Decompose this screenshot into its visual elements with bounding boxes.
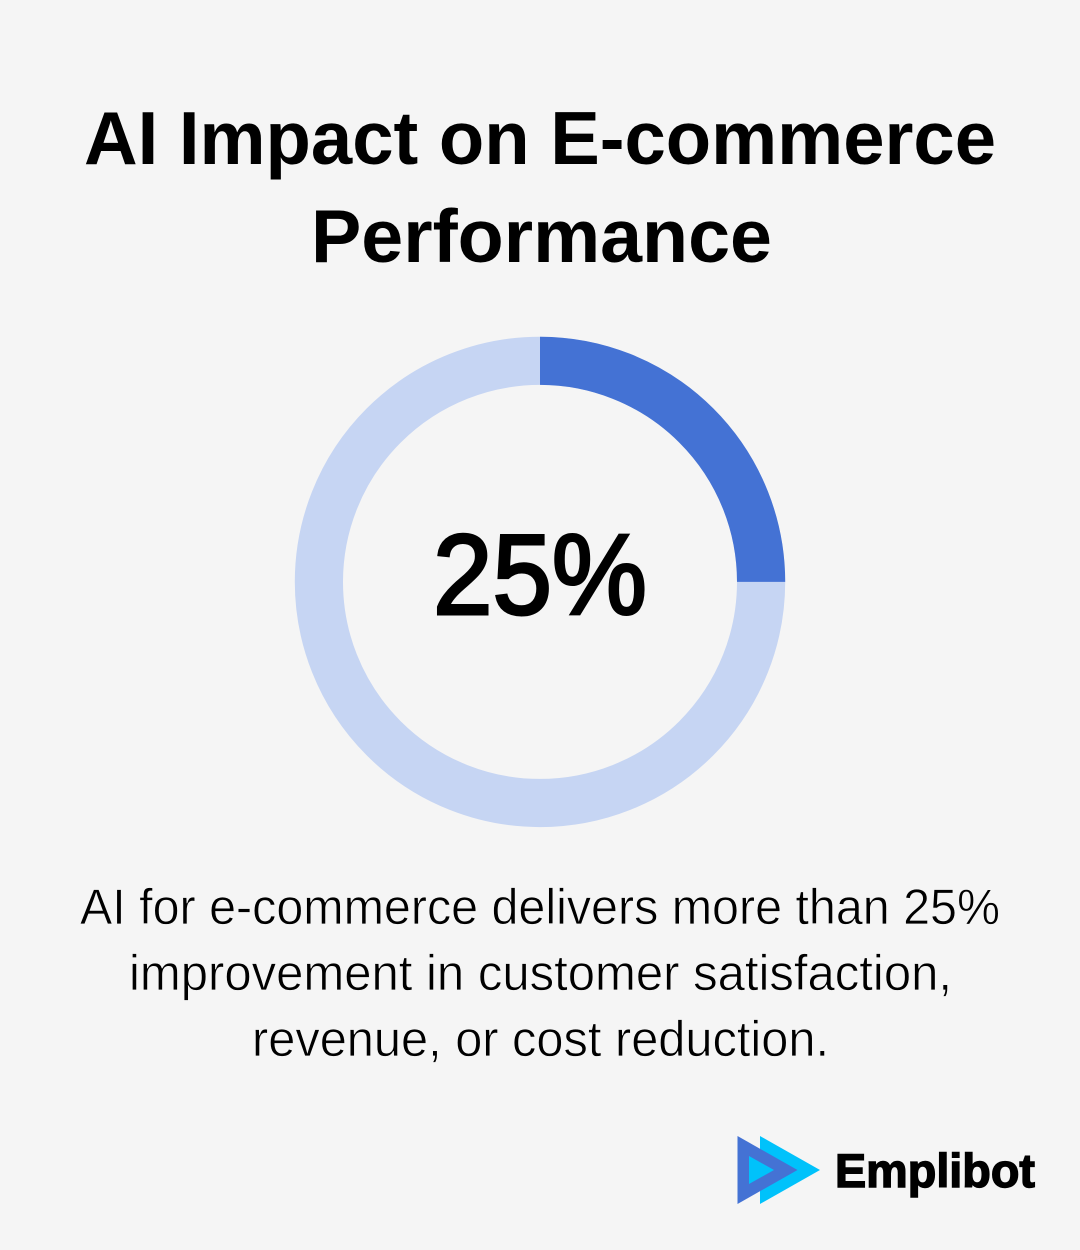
donut chart: 25% <box>319 361 761 803</box>
description text: AI for e-commerce delivers more than 25% <box>80 879 1000 935</box>
title: Performance <box>311 194 772 278</box>
title <box>84 96 996 278</box>
center value: 25% <box>433 512 647 639</box>
logo wordmark: Emplibot <box>835 1144 1035 1197</box>
description text: improvement in customer satisfaction, <box>129 945 952 1001</box>
title: AI Impact on E-commerce <box>84 96 996 180</box>
logo: Emplibot <box>738 1136 1035 1204</box>
description text <box>80 879 1000 1067</box>
icon: play triangles <box>738 1136 820 1204</box>
description text: revenue, or cost reduction. <box>252 1011 829 1067</box>
